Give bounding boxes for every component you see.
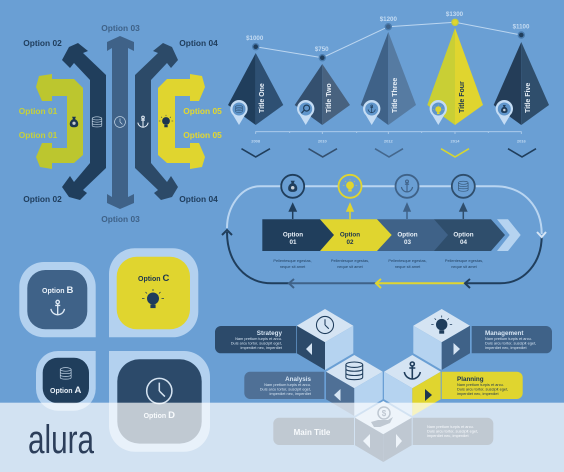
trend points [253, 19, 524, 61]
logo: alura: alura [28, 418, 95, 462]
step captions: neque sit amet [451, 264, 478, 269]
cube: analysis [326, 355, 383, 416]
years: 2010 [318, 138, 328, 144]
years: 2012 [384, 138, 394, 144]
years: 2016 [517, 138, 527, 144]
values: $1100 [513, 24, 530, 30]
option labels: Option 04 [179, 194, 218, 204]
panel: option squares [19, 248, 210, 452]
analysis callout: Nam pretium turpis et arcu. [264, 382, 311, 387]
kite four: Title Four [459, 81, 466, 113]
option labels: Option 01 [19, 130, 58, 140]
panel: kite chart [228, 11, 549, 157]
step captions: Pellentesque egestas, [445, 258, 483, 263]
cube: main title: $ [382, 409, 387, 418]
kite two: Title Two [326, 83, 333, 113]
arrow: option 03 vertical [107, 36, 134, 209]
step captions [273, 258, 483, 269]
kite five [494, 42, 549, 125]
panel: hexagon cubes [0, 309, 564, 472]
values: $1000 [246, 35, 264, 42]
option D: Option D [144, 410, 175, 421]
step captions: Pellentesque egestas, [388, 258, 427, 263]
cube: planning [384, 355, 441, 416]
planning callout [442, 372, 523, 399]
main text callout: Nam pretium turpis et arcu. [427, 424, 474, 429]
step captions: neque sit amet [337, 264, 364, 269]
strategy callout: Strategy [257, 330, 282, 337]
arrow: option 04 [135, 43, 178, 200]
kite three [361, 32, 416, 125]
kite one: Title One [259, 83, 266, 113]
option C: Option C [138, 273, 170, 284]
cube: strategy [297, 309, 353, 370]
step band [497, 219, 521, 251]
kite two [295, 64, 350, 125]
values: $1300 [446, 11, 464, 18]
kite five: Title Five [525, 83, 532, 113]
strategy callout: imperdiet nec, imperdiet [240, 345, 283, 350]
management callout: Management [485, 330, 524, 337]
step labels: Option [340, 232, 360, 238]
step icons [288, 179, 468, 192]
analysis callout: Analysis [285, 376, 311, 383]
management callout [472, 326, 552, 353]
kite four [427, 28, 483, 125]
option C [109, 248, 198, 337]
analysis callout [244, 372, 324, 399]
step labels: Option [283, 232, 303, 238]
values: $750 [315, 46, 329, 53]
arrow icons [70, 115, 173, 127]
values [246, 11, 530, 53]
planning callout: Nam pretium turpis et arcu. [457, 382, 504, 387]
step captions: neque sit amet [280, 264, 306, 269]
years [251, 138, 527, 144]
strategy callout [215, 326, 296, 353]
option labels: Option 01 [19, 106, 58, 116]
step circles [281, 175, 475, 198]
option labels: Option 03 [101, 214, 140, 224]
option labels: Option 02 [23, 38, 62, 48]
pins [230, 100, 513, 125]
option labels [19, 23, 222, 224]
option labels: Option 03 [101, 23, 140, 33]
planning callout: Duis arcu tortor, suscipit eget, [457, 386, 508, 392]
analysis callout: imperdiet nec, imperdiet [269, 391, 312, 396]
option labels: Option 04 [179, 38, 218, 48]
step labels: 02 [346, 239, 354, 246]
step captions: Pellentesque egestas, [331, 258, 369, 263]
step labels: Option [397, 232, 418, 238]
cube: management [413, 309, 470, 370]
option B: Option B [42, 285, 74, 296]
overlay band [0, 403, 564, 472]
option D [109, 351, 210, 452]
panel: arrows diagram [19, 23, 222, 224]
main text callout [413, 418, 493, 445]
panel: process loop [222, 175, 546, 288]
step labels: 03 [404, 239, 411, 246]
chevrons [242, 149, 536, 157]
option labels: Option 05 [183, 106, 222, 116]
step arrows [290, 204, 466, 219]
cube: main title [355, 401, 412, 462]
kite three: Title Three [392, 78, 399, 113]
option labels: Option 02 [23, 194, 62, 204]
step captions: Pellentesque egestas, [273, 258, 312, 263]
management callout: Duis arcu tortor, suscipit eget, [485, 340, 536, 346]
strategy callout: Duis arcu tortor, suscipit eget, [231, 340, 282, 346]
step labels: Option [453, 232, 474, 238]
option A [36, 351, 96, 411]
years: 2008 [251, 138, 261, 144]
analysis callout: Duis arcu tortor, suscipit eget, [260, 386, 311, 392]
step captions: neque sit amet [395, 264, 421, 269]
step labels: 01 [289, 239, 297, 246]
values: $1200 [380, 16, 397, 23]
main text callout: Duis arcu tortor, suscipit eget, [427, 428, 478, 434]
management callout: Nam pretium turpis et arcu. [485, 336, 532, 341]
option B [19, 262, 96, 337]
arrow: option 05 yellow [158, 74, 205, 169]
management callout: imperdiet nec, imperdiet [485, 345, 527, 350]
timeline [256, 132, 521, 134]
years: 2014 [451, 138, 460, 144]
main title callout: Main Title [294, 428, 331, 437]
step labels [283, 232, 474, 246]
kite one [228, 53, 283, 125]
planning callout: imperdiet nec, imperdiet [457, 391, 499, 396]
arrow: option 02 [62, 43, 106, 200]
strategy callout: Nam pretium turpis et arcu. [235, 336, 282, 341]
planning callout: Planning [457, 376, 484, 383]
option labels: Option 05 [183, 130, 222, 140]
loop track [222, 186, 546, 288]
option A: Option A [50, 385, 82, 396]
arrow: option 01 olive [36, 74, 83, 169]
main text callout: imperdiet nec, imperdiet [427, 433, 469, 438]
trend line [256, 22, 521, 58]
step labels: 04 [460, 239, 467, 246]
main title callout [273, 418, 354, 445]
